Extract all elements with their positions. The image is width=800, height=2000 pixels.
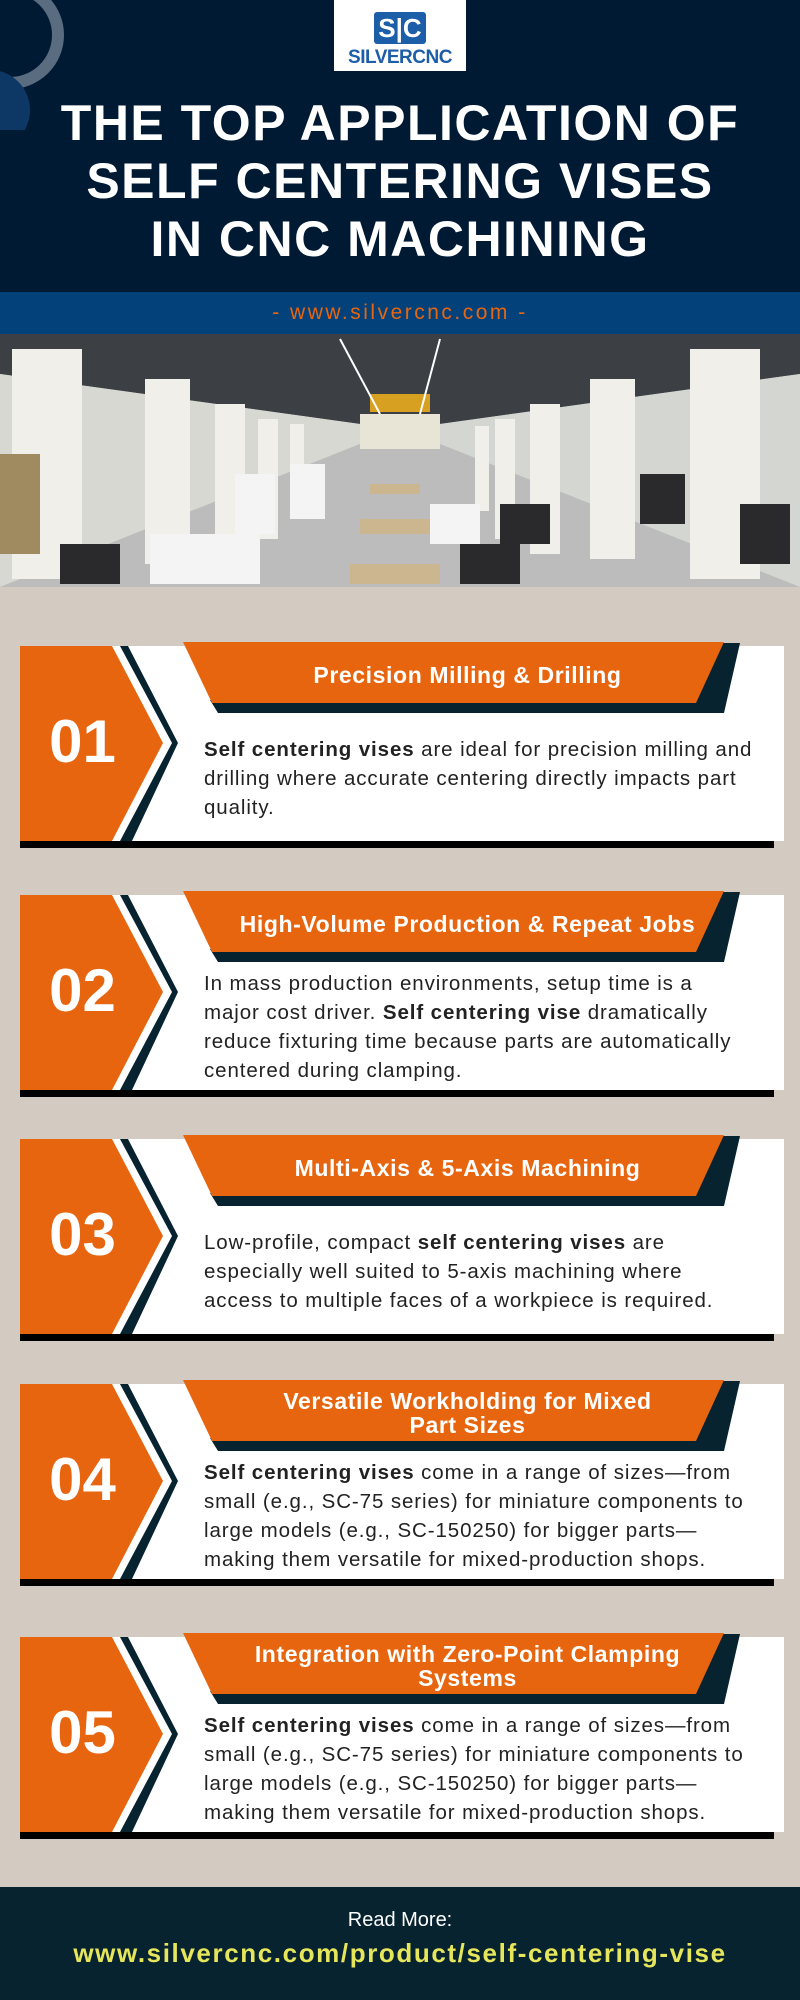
body text [204,1714,744,1824]
heading: Part Sizes [410,1412,525,1438]
body text: Self centering vises come in a range of sizes—from [204,1461,731,1484]
body text: access to multiple faces of a workpiece is required. [204,1288,713,1312]
logo: SILVERCNC [348,47,452,68]
title: SELF CENTERING VISES [86,153,714,209]
card 02 [20,891,784,1097]
body text [204,1461,744,1571]
number: 03 [49,1201,116,1268]
logo: S|C [378,13,422,43]
heading: Versatile Workholding for Mixed [283,1388,652,1414]
heading [283,1388,652,1438]
number: 05 [49,1699,116,1766]
logo [334,0,466,71]
title: THE TOP APPLICATION OF [61,95,739,151]
heading [255,1640,680,1691]
body text: making them versatile for mixed-production shops. [204,1548,706,1571]
body text: Self centering vises come in a range of sizes—from [204,1714,731,1737]
heading: Precision Milling & Drilling [313,662,622,688]
body text: centered during clamping. [204,1059,462,1082]
number: 04 [49,1446,116,1513]
body text: reduce fixturing time because parts are automatically [204,1030,731,1053]
body text: small (e.g., SC-75 series) for miniature components to [204,1490,744,1513]
card shapes: chevron and banner [20,642,740,841]
body text [204,738,752,818]
body text: large models (e.g., SC-150250) for bigger parts— [204,1772,697,1795]
heading: High-Volume Production & Repeat Jobs [240,910,695,936]
title: IN CNC MACHINING [150,211,649,267]
card 04 [20,1380,784,1586]
title [61,95,739,267]
body text [204,972,731,1082]
card shapes: chevron and banner [20,1380,740,1579]
website band [0,292,800,334]
footer [0,1887,800,2000]
heading: Systems [418,1664,517,1690]
body text: making them versatile for mixed-production shops. [204,1801,706,1824]
body text: In mass production environments, setup time is a [204,972,693,995]
factory photo [0,334,800,587]
card 03 [20,1135,784,1341]
body text: major cost driver. Self centering vise dramatically [204,1001,708,1024]
body text: small (e.g., SC-75 series) for miniature components to [204,1743,744,1766]
body text: drilling where accurate centering directly impacts part [204,766,737,790]
card shapes: chevron and banner [20,1135,740,1334]
footer url: www.silvercnc.com/product/self-centering-vise [73,1938,727,1968]
card shapes: chevron and banner [20,891,740,1090]
number: 01 [49,708,116,775]
card 01 [20,642,784,848]
website band: - www.silvercnc.com - [272,301,528,324]
body text [204,1230,713,1312]
body text: Self centering vises are ideal for precision milling and [204,738,752,760]
heading: Integration with Zero-Point Clamping [255,1640,680,1666]
number: 02 [49,957,116,1024]
body text: quality. [204,796,275,818]
heading: Multi-Axis & 5-Axis Machining [295,1154,640,1180]
read more label: Read More: [348,1909,452,1931]
body text: especially well suited to 5-axis machining where [204,1260,682,1282]
card shapes: chevron and banner [20,1633,740,1832]
card 05 [20,1633,784,1839]
body text: Low-profile, compact self centering vises are [204,1230,665,1254]
body text: large models (e.g., SC-150250) for bigger parts— [204,1519,697,1542]
decorative circles [0,0,64,130]
header background [0,0,800,292]
